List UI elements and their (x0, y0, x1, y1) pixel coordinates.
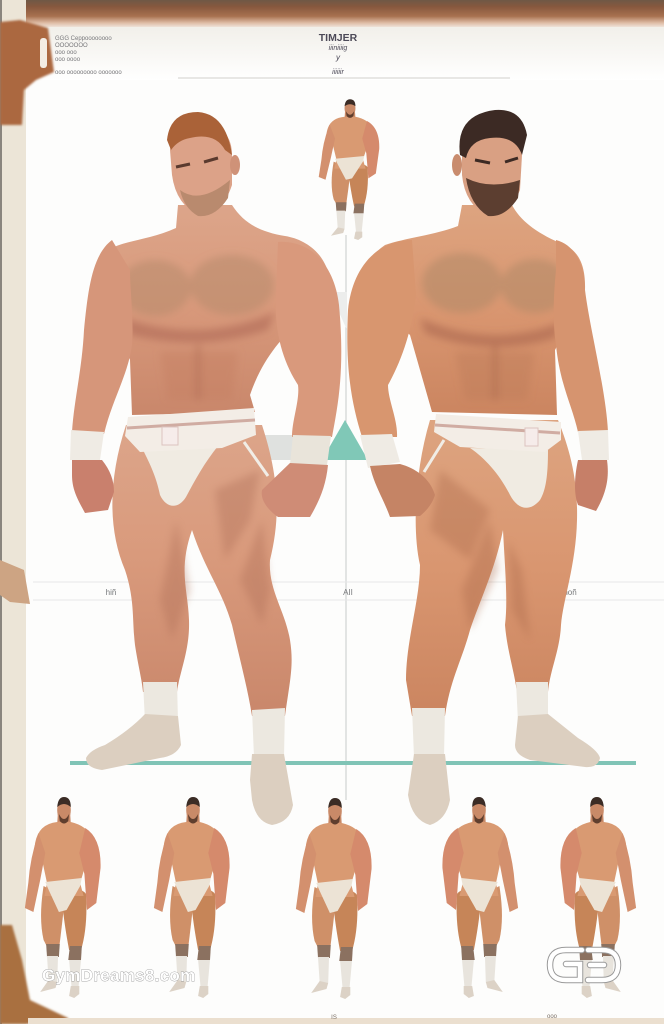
leg shading (160, 470, 270, 640)
chest hair and muscle shading (420, 253, 569, 400)
right sock and shoe (250, 708, 293, 825)
guide labels: AII (343, 588, 353, 597)
left arm (72, 240, 133, 434)
figure: small bottom 3 (296, 798, 372, 999)
right hand (575, 460, 608, 511)
aged bottom border (28, 1018, 664, 1024)
left arm (347, 240, 416, 437)
header title: iiiniiiig (329, 45, 347, 52)
right arm (276, 242, 341, 437)
leg shading (430, 470, 530, 640)
guide labels: ñoñ (563, 588, 577, 597)
header small text left: OOOOOOO (55, 43, 88, 49)
header title: y (335, 53, 341, 62)
left sock and shoe (408, 708, 450, 825)
right hand (262, 463, 328, 517)
head (452, 110, 527, 216)
legs (406, 420, 577, 716)
left hand (370, 464, 435, 517)
header small text left: ooo oooo (55, 57, 81, 63)
header title: TIMJER (319, 32, 358, 44)
header small text left: GGG Ceppoooooooo (55, 36, 112, 42)
figure: small bottom 4 (442, 797, 518, 998)
centre axis and guides (33, 235, 664, 800)
header small text left: ooo ooo (55, 50, 77, 56)
figure: small bottom 2 (154, 797, 230, 998)
left underwear (125, 408, 268, 506)
header band (28, 25, 664, 80)
footer labels: IS (331, 1015, 337, 1021)
figure: small top (319, 99, 379, 240)
header title (319, 32, 358, 76)
watermark logo (550, 950, 618, 980)
header small text left: ooo ooooooooo ooooooo (55, 70, 122, 76)
guide labels (106, 588, 577, 597)
left wristband (70, 430, 104, 460)
teal ground line (70, 761, 636, 765)
guide labels: hiñ (106, 588, 116, 597)
torso (102, 205, 331, 415)
left wristband (360, 434, 400, 468)
aged left border (0, 0, 68, 1024)
torso (362, 205, 585, 415)
figure: small bottom 5 (560, 797, 636, 998)
right wristband (290, 435, 331, 465)
watermark text: GymDreams8.com (42, 966, 196, 985)
chest hair and muscle shading (119, 255, 275, 400)
figure: large right (347, 110, 609, 825)
aged top border (0, 0, 664, 27)
footer labels (331, 1014, 558, 1021)
footer labels: ooo (547, 1014, 558, 1020)
right arm (554, 240, 608, 432)
head (167, 112, 240, 216)
header title: iiiiiir (332, 69, 344, 76)
legs (112, 425, 292, 716)
figure: small bottom 1 (25, 797, 101, 998)
left hand (72, 460, 114, 513)
right wristband (578, 430, 609, 460)
figure: large left (70, 112, 341, 825)
right sock and shoe (515, 682, 600, 767)
left sock and shoe (86, 682, 181, 770)
header small text left (55, 36, 122, 76)
right underwear (424, 414, 561, 508)
